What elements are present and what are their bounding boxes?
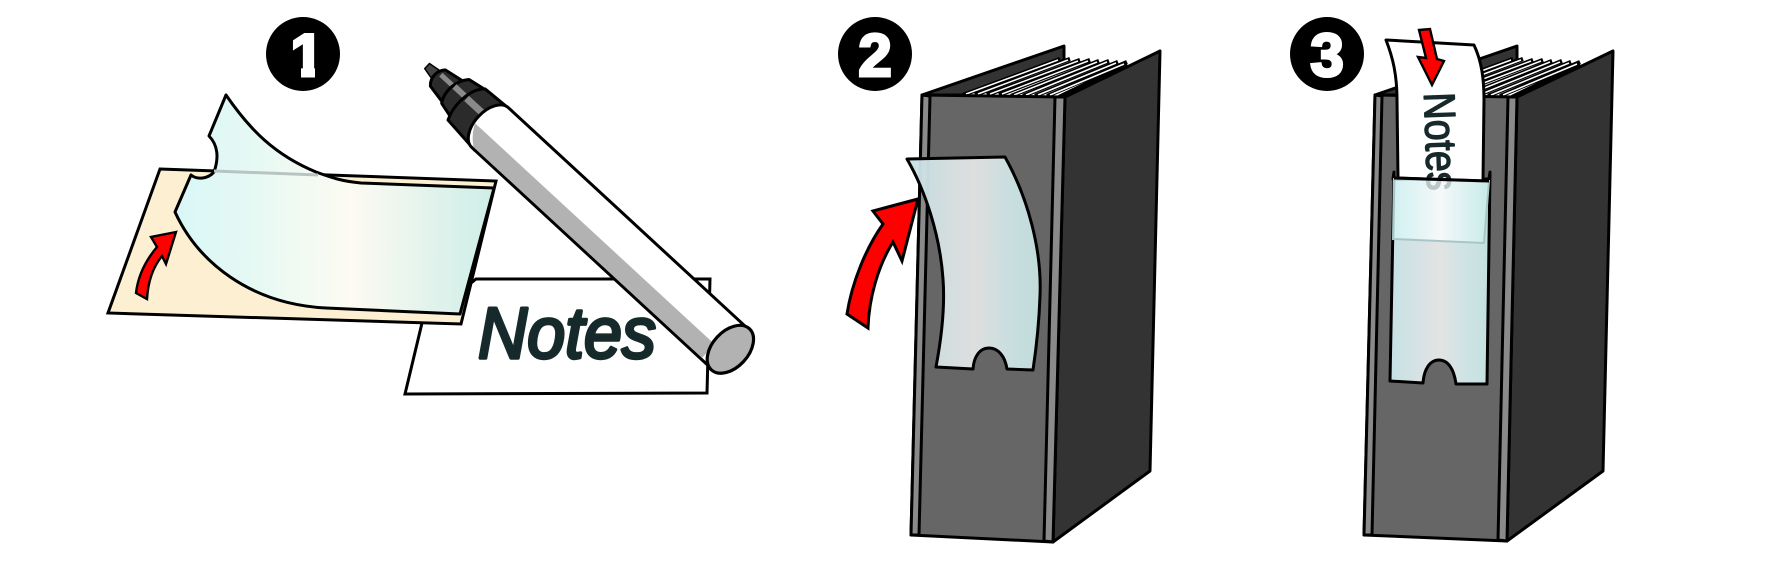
- step 2: clear pocket film: [907, 157, 1040, 370]
- step 2 number badge: 2: [858, 22, 892, 89]
- pages: [1416, 59, 1580, 97]
- step 1 number badge: [266, 17, 340, 91]
- left spine strip: [1364, 95, 1382, 535]
- rotated Notes text: Notes: [1414, 92, 1466, 191]
- step 1 number badge: 1: [290, 22, 324, 89]
- right spine strip: [1498, 97, 1517, 541]
- step 3: red down arrow: [1418, 29, 1444, 85]
- step 1: backing sheet: [108, 169, 496, 324]
- step 3: label sliding into pocket: [1386, 40, 1484, 191]
- back cover: [1375, 46, 1517, 95]
- step 3: strip top edge: [1394, 178, 1489, 181]
- step 1: red peel arrow: [136, 232, 176, 299]
- step 2: red arrow: [847, 199, 918, 328]
- step 3 number badge: [1290, 17, 1364, 91]
- pages: [963, 59, 1127, 97]
- step 3: clear pocket on binder: [1390, 172, 1490, 384]
- side cover: [1507, 51, 1613, 541]
- step 3: dark binder: [1364, 46, 1613, 541]
- step 3 number badge: 3: [1310, 22, 1344, 89]
- side cover: [1053, 51, 1160, 542]
- step 1: peeling clear film: [175, 95, 494, 314]
- front face: [911, 95, 1065, 542]
- step 1: marker pen: [406, 47, 763, 382]
- front face: [1364, 95, 1517, 541]
- handwritten Notes text: Notes: [478, 294, 656, 374]
- step 2: dark binder: [911, 46, 1160, 542]
- step 1: label sheet with Notes: [405, 279, 710, 394]
- left spine strip: [911, 95, 930, 535]
- back cover: [922, 46, 1064, 95]
- right spine strip: [1044, 97, 1065, 542]
- step 3: protective strip over label: [1393, 179, 1489, 243]
- step 2 number badge: [838, 17, 912, 91]
